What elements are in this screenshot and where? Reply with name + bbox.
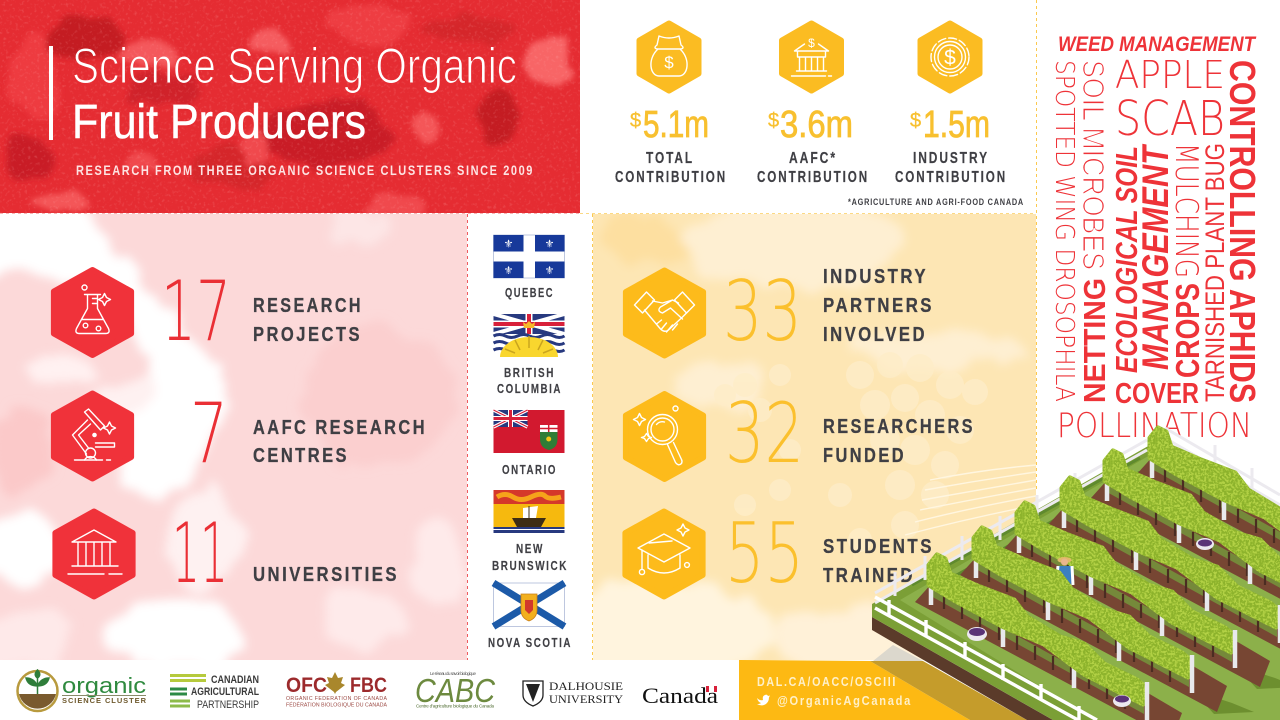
- amount: $: [910, 110, 921, 132]
- word: controlling aphids: CONTROLLING APHIDS: [1222, 60, 1263, 403]
- stat: AAFC research centres: [54, 385, 427, 482]
- word: netting: NETTING: [1077, 278, 1112, 403]
- logo: organic science cluster: SCIENCE CLUSTER: [62, 696, 147, 705]
- vineyard platform: [872, 445, 1280, 720]
- logo: Dalhousie University: UNIVERSITY: [549, 694, 624, 706]
- title block: [49, 38, 534, 178]
- logo: OFC FBC: FÉDÉRATION BIOLOGIQUE DU CANADA: [286, 702, 388, 708]
- amount: [630, 104, 709, 146]
- caption: [615, 150, 727, 186]
- flag: Quebec: ⚜: [504, 238, 513, 250]
- label: [823, 536, 934, 587]
- stat: researchers funded: [626, 385, 975, 482]
- logo: Dalhousie University: DALHOUSIE: [549, 681, 623, 693]
- icon: twitter bird: [757, 695, 770, 705]
- logo: OFC FBC: [286, 672, 388, 708]
- label: FUNDED: [823, 445, 906, 467]
- amount: [910, 104, 990, 146]
- logo: canadian agricultural partnership: [170, 674, 259, 711]
- footnote: *AGRICULTURE AND AGRI-FOOD CANADA: [848, 197, 1024, 208]
- panel: pink research stats background: [0, 200, 467, 670]
- province flags column: [488, 235, 572, 650]
- stat: research projects: [54, 263, 363, 360]
- label: New Brunswick: BRUNSWICK: [492, 559, 568, 573]
- logo: Dalhousie University: [523, 681, 624, 706]
- logo: CABC: Centre d'agriculture biologique du Canada: [416, 704, 494, 708]
- word: scab: SCAB: [1115, 91, 1225, 147]
- fence: back left: [875, 440, 1147, 603]
- number: 32: [725, 385, 804, 482]
- fruit basket: [1196, 538, 1214, 550]
- label: INDUSTRY: [823, 266, 928, 288]
- word: spotted wing drosophila: SPOTTED WING DROSOPHILA: [1049, 60, 1079, 402]
- flag: Quebec: [494, 235, 564, 278]
- hex icon: gear with dollar: [920, 24, 980, 90]
- label: INVOLVED: [823, 324, 927, 346]
- label: Nova Scotia: NOVA SCOTIA: [488, 636, 572, 650]
- logo: OFC FBC: FBC: [350, 674, 387, 697]
- caption: INDUSTRY: [913, 150, 989, 167]
- hex icon: magnifying glass: [626, 394, 703, 479]
- logo: organic science cluster: organic: [62, 673, 146, 698]
- hex icon: handshake: [626, 270, 703, 356]
- fence: front: [875, 597, 1097, 720]
- word: apple: APPLE: [1115, 53, 1225, 97]
- label: [253, 295, 363, 346]
- label: AAFC RESEARCH: [253, 417, 427, 439]
- label: [253, 417, 427, 467]
- label: RESEARCH: [253, 295, 363, 317]
- label: New Brunswick: [492, 542, 568, 573]
- subtitle: RESEARCH FROM THREE ORGANIC SCIENCE CLUSTERS SINCE 2009: [76, 162, 534, 178]
- logo: canadian agricultural partnership: AGRICULTURAL: [191, 686, 259, 698]
- amount: 1.5m: [923, 104, 990, 146]
- label: PARTNERS: [823, 295, 934, 317]
- word: crops: CROPS: [1169, 283, 1206, 378]
- funding stat: total contribution: [615, 24, 727, 186]
- label: Quebec: QUEBEC: [505, 286, 554, 300]
- label: UNIVERSITIES: [253, 564, 399, 586]
- title line 1: Science Serving Organic: [72, 38, 517, 94]
- caption: CONTRIBUTION: [895, 169, 1007, 186]
- word: weed management: WEED MANAGEMENT: [1058, 33, 1257, 56]
- label: British Columbia: COLUMBIA: [497, 382, 562, 396]
- logo: organic science cluster: [18, 670, 147, 711]
- hex icon: bank: [782, 24, 841, 90]
- hex icon: columned building: [55, 512, 133, 596]
- stat: industry partners: [626, 263, 934, 360]
- caption: AAFC*: [789, 150, 837, 167]
- word: cover: COVER: [1115, 378, 1199, 410]
- flag: New Brunswick: [494, 490, 564, 533]
- word: mulching: MULCHING: [1168, 143, 1204, 278]
- title accent bar: [49, 46, 53, 140]
- panel: yellow people stats background: [593, 214, 1036, 660]
- flag: Quebec: ⚜: [545, 238, 554, 250]
- caption: TOTAL: [646, 150, 694, 167]
- amount: 5.1m: [643, 104, 709, 146]
- word cloud: [1049, 33, 1263, 446]
- word: management: MANAGEMENT: [1135, 143, 1176, 370]
- label: British Columbia: BRITISH: [504, 366, 555, 380]
- footer band: [0, 660, 1280, 720]
- header panel: strawberry photo: [0, 0, 580, 217]
- caption: CONTRIBUTION: [757, 169, 869, 186]
- label: PROJECTS: [253, 324, 362, 346]
- logo: canadian agricultural partnership: PARTNERSHIP: [197, 699, 259, 711]
- hex icon: gear with dollar: $: [944, 46, 956, 70]
- fence: back right: [1165, 428, 1280, 505]
- label: RESEARCHERS: [823, 416, 975, 438]
- logo: OFC FBC: ORGANIC FEDERATION OF CANADA: [286, 696, 388, 702]
- hex icon: graduation cap: [625, 512, 703, 596]
- amount: $: [630, 110, 641, 132]
- footer contact band: [739, 645, 1027, 720]
- fruit baskets: [967, 627, 1131, 707]
- word: soil microbes: SOIL MICROBES: [1076, 60, 1111, 270]
- amount: $: [768, 110, 779, 132]
- flag: Nova Scotia: [494, 583, 564, 626]
- word: tarnished plant bug: TARNISHED PLANT BUG: [1200, 143, 1230, 402]
- label: STUDENTS: [823, 536, 934, 558]
- funding stat: industry contribution: [895, 24, 1007, 186]
- hex icon: money bag: $: [664, 53, 674, 72]
- label: [823, 416, 975, 467]
- contact: twitter handle: @OrganicAgCanada: [777, 693, 912, 708]
- caption: [895, 150, 1007, 186]
- hex icon: money bag: [640, 24, 698, 90]
- label: British Columbia: [497, 366, 562, 396]
- hex icon: microscope: [54, 394, 131, 478]
- word: ecological soil: ECOLOGICAL SOIL: [1109, 146, 1144, 373]
- stat: universities: [55, 505, 399, 602]
- label: [823, 266, 934, 346]
- funding stat: AAFC contribution: [757, 24, 869, 186]
- logo: CABC: Le réseau du savoir biologique: [430, 671, 476, 676]
- vine rows: [915, 428, 1280, 720]
- word: pollination: POLLINATION: [1057, 406, 1252, 446]
- logo: canadian agricultural partnership: CANADIAN: [211, 674, 259, 686]
- label: TRAINED: [823, 565, 915, 587]
- logo: CABC: CABC: [415, 672, 496, 709]
- caption: [757, 150, 869, 186]
- number: 11: [172, 505, 228, 602]
- flag: Quebec: ⚜: [504, 265, 513, 277]
- label: New Brunswick: NEW: [516, 542, 544, 556]
- farmer: [1056, 557, 1073, 627]
- illustration: isometric vineyard: [872, 428, 1280, 720]
- flag: British Columbia: [494, 314, 564, 357]
- amount: 3.6m: [780, 104, 853, 146]
- label: Ontario: ONTARIO: [502, 463, 557, 477]
- number: 55: [725, 505, 804, 602]
- hex icon: bank: $: [808, 36, 815, 50]
- stat: students trained: [625, 505, 934, 602]
- flag: Ontario: [494, 410, 564, 453]
- title line 2: Fruit Producers: [72, 96, 366, 149]
- panel dividers: [0, 0, 1036, 660]
- number: 33: [723, 263, 802, 360]
- flag: Quebec: ⚜: [545, 265, 554, 277]
- hex icon: flask: [54, 270, 131, 355]
- logo: OFC FBC: OFC: [286, 674, 327, 697]
- label: CENTRES: [253, 445, 349, 467]
- caption: CONTRIBUTION: [615, 169, 727, 186]
- number: 17: [161, 263, 231, 360]
- logo: Canada wordmark: Canada: [642, 683, 718, 708]
- contact: website: DAL.CA/OACC/OSCIII: [757, 674, 897, 689]
- number: 7: [190, 385, 228, 482]
